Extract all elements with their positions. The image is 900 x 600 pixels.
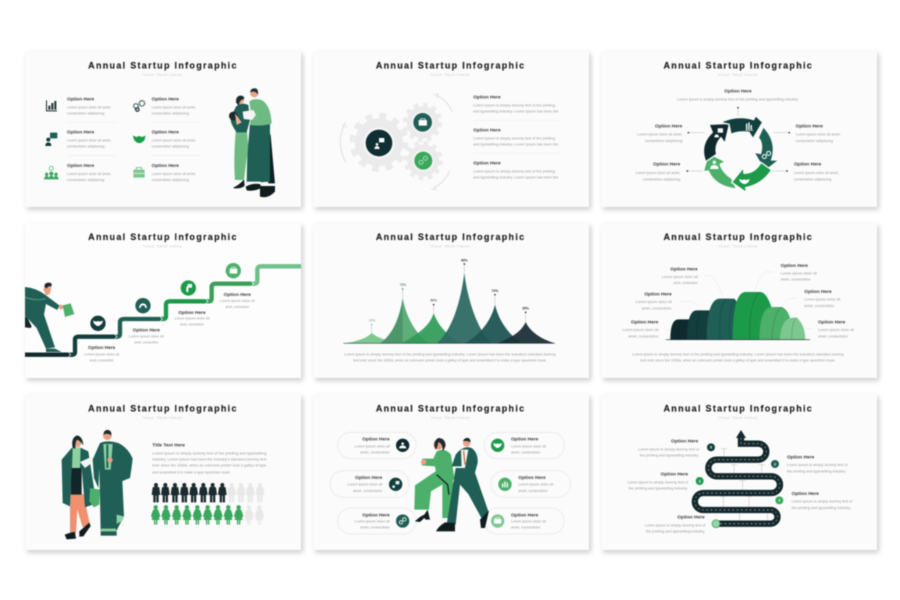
text block: Title Text Here bbox=[152, 442, 186, 447]
option 1 bbox=[67, 96, 111, 115]
label bottom left: the printing and typesetting industry. bbox=[646, 529, 705, 533]
marker 5: 5 bbox=[710, 446, 712, 450]
option left upper: Option Here bbox=[655, 123, 683, 128]
label top left: Option Here bbox=[671, 439, 699, 444]
option 3: Lorem ipsum dolor sit amet, bbox=[67, 172, 111, 176]
road bbox=[695, 430, 780, 524]
option right lower: Option Here bbox=[794, 162, 822, 167]
option 3 bbox=[67, 163, 111, 182]
panel: hills chart bbox=[601, 223, 879, 381]
arrow: lower left segment bbox=[703, 153, 737, 189]
gear: gears icon bbox=[406, 143, 441, 178]
step label 1: amet, consectetur bbox=[90, 358, 114, 362]
chart: peaks: 70% bbox=[492, 289, 498, 293]
step label 2: Lorem ipsum dolor sit bbox=[129, 334, 164, 338]
heading: Annual Startup Infographic bbox=[376, 232, 524, 242]
option right lower: Lorem ipsum dolor sit amet, bbox=[794, 171, 839, 175]
description bbox=[632, 352, 844, 362]
option 1: Lorem ipsum dolor sit amet, bbox=[67, 105, 111, 109]
illustration: walking colleagues bbox=[414, 438, 489, 531]
step label 2 bbox=[129, 328, 164, 344]
option right lower: consectetur adipiscing bbox=[794, 177, 831, 181]
label 1 bbox=[662, 266, 698, 285]
heading: Annual Startup Infographic bbox=[663, 404, 812, 414]
option right lower bbox=[794, 162, 839, 181]
option 2: Option Here bbox=[67, 130, 95, 135]
label bottom left: Lorem ipsum is simply dummy text of bbox=[645, 523, 705, 527]
heading: Annual Startup Infographic bbox=[88, 232, 236, 242]
step label 1 bbox=[84, 345, 119, 362]
panel: gears bbox=[313, 51, 591, 210]
pill: left bottom: Lorem ipsum dolor sit bbox=[355, 520, 390, 524]
option left lower bbox=[635, 162, 681, 181]
option 3: Option Here bbox=[67, 163, 95, 168]
panel: pictogram statistics bbox=[25, 394, 303, 553]
option 4: consectetur adipiscing bbox=[152, 111, 189, 115]
pill: right bottom: amet, consectetur bbox=[511, 526, 541, 530]
step label 3: Option Here bbox=[178, 310, 206, 315]
chart: peaks: 50% bbox=[430, 299, 437, 303]
connectors bbox=[665, 272, 812, 330]
arrow: right segment bbox=[754, 127, 779, 171]
panel: circular arrows bbox=[601, 51, 879, 210]
label 1: amet, consectetur bbox=[674, 281, 698, 285]
step label 4 bbox=[220, 292, 255, 309]
option 6 bbox=[152, 163, 196, 182]
description: Lorem ipsum is simply dummy text of the printing and typesetting industry. Lorem Ipsum has been the industry's standard dummy bbox=[344, 352, 556, 356]
option top: Lorem ipsum is simply dummy text of the printing and typesetting industry. bbox=[677, 98, 799, 102]
panel: people and six options bbox=[25, 51, 303, 210]
label middle left: Lorem ipsum is simply dummy text of bbox=[627, 480, 688, 484]
label 2: amet, consectetur bbox=[642, 306, 673, 310]
step label 2: Option Here bbox=[133, 328, 161, 333]
option 2: Option Here bbox=[473, 127, 501, 132]
subheading: Your Text Here bbox=[430, 416, 470, 420]
option top: Option Here bbox=[724, 88, 752, 93]
label lower right: Option Here bbox=[792, 491, 820, 496]
heading: Annual Startup Infographic bbox=[376, 61, 524, 71]
option 1: Option Here bbox=[67, 96, 95, 101]
pill: right middle: Option Here bbox=[518, 475, 546, 480]
option top bbox=[677, 88, 799, 102]
option 3: and typesetting industry. Lorem Ipsum has been the bbox=[473, 175, 558, 179]
marker 1 bbox=[712, 520, 720, 528]
panel: winding road bbox=[601, 394, 879, 553]
step label 3: Lorem ipsum dolor sit bbox=[174, 317, 210, 321]
label 4 bbox=[781, 263, 817, 282]
label 6: amet, consectetur bbox=[818, 334, 849, 338]
label 2 bbox=[636, 292, 673, 310]
pictogram row: men bbox=[152, 483, 264, 502]
pill: left middle: amet, consectetur bbox=[353, 489, 383, 493]
step label 3: amet, consectetur bbox=[180, 323, 205, 327]
option 4 bbox=[152, 96, 196, 115]
option right upper: Option Here bbox=[796, 123, 824, 128]
label 5: Lorem ipsum dolor sit bbox=[804, 298, 840, 302]
icon: team bbox=[44, 166, 59, 179]
label 3 bbox=[622, 320, 659, 338]
chart: peaks: 75% bbox=[400, 283, 406, 287]
label upper right bbox=[787, 454, 848, 473]
step label 1: Option Here bbox=[88, 345, 116, 350]
heading: Annual Startup Infographic bbox=[88, 404, 236, 414]
pill: left top: Lorem ipsum dolor sit bbox=[355, 444, 390, 448]
option 2: Lorem ipsum is simply dummy text of the printing bbox=[473, 136, 555, 140]
marker 5 bbox=[707, 443, 715, 451]
illustration: man climbing with documents bbox=[25, 283, 74, 352]
icon: gears bbox=[134, 101, 145, 111]
option 2: and typesetting industry. Lorem Ipsum has been the bbox=[473, 142, 558, 146]
step icon 1 bbox=[90, 316, 106, 331]
chart: peaks bbox=[343, 258, 555, 343]
label upper right: Lorem ipsum is simply dummy text of bbox=[787, 463, 848, 467]
chart: peaks: 90% bbox=[461, 258, 468, 262]
pill: left bottom bbox=[338, 508, 416, 534]
pill: left bottom: amet, consectetur bbox=[360, 526, 391, 530]
step icon 3 bbox=[181, 280, 196, 296]
step label 1: Lorem ipsum dolor sit bbox=[84, 352, 119, 356]
pill: left middle: Option Here bbox=[355, 475, 383, 480]
marker 4: 4 bbox=[778, 499, 781, 503]
marker 3: 3 bbox=[699, 479, 701, 483]
stairs path bbox=[25, 266, 301, 357]
pictogram row: women bbox=[151, 505, 264, 525]
label lower right: the printing and typesetting industry. bbox=[792, 506, 851, 510]
step label 3 bbox=[174, 310, 210, 327]
description: text ever since the 1500s, when an unknown printer took a galley of type and scrambled it to make a type specimen book. bbox=[640, 358, 836, 362]
description: text ever since the 1500s, when an unknown printer took a galley of type and scrambled it to make a type specimen book. bbox=[353, 358, 547, 362]
option 6: Option Here bbox=[152, 163, 180, 168]
pill: left top: amet, consectetur bbox=[360, 450, 391, 454]
step label 4: Lorem ipsum dolor sit bbox=[220, 299, 255, 303]
pill: right middle: amet, consectetur bbox=[518, 489, 549, 493]
label middle left bbox=[627, 472, 689, 490]
option 5 bbox=[152, 130, 196, 149]
subheading: Your Text Here bbox=[718, 416, 758, 420]
option 2: Lorem ipsum dolor sit amet, bbox=[67, 139, 111, 143]
label 6 bbox=[818, 319, 854, 338]
pill: left middle bbox=[330, 471, 409, 497]
label lower right bbox=[792, 491, 852, 510]
label 3: Lorem ipsum dolor sit bbox=[622, 328, 658, 332]
text block: ever since the 1500s, when an unknown printer took a galley of type bbox=[152, 463, 266, 467]
text block bbox=[152, 442, 266, 474]
pill: right top: Option Here bbox=[511, 437, 539, 442]
option 2 bbox=[67, 130, 111, 149]
subheading: Your Text Here bbox=[718, 73, 758, 77]
subheading: Your Text Here bbox=[718, 244, 758, 248]
heading: Annual Startup Infographic bbox=[376, 404, 524, 414]
label 3: Option Here bbox=[631, 320, 659, 325]
label bottom left: Option Here bbox=[677, 515, 705, 520]
label top left: the printing and typesetting industry. bbox=[640, 453, 699, 457]
arrow: left segment bbox=[703, 123, 730, 162]
pill: left top: Option Here bbox=[362, 437, 390, 442]
option 4: Lorem ipsum dolor sit amet, bbox=[152, 105, 196, 109]
pill: right bottom bbox=[484, 508, 564, 534]
subheading: Your Text Here bbox=[142, 416, 182, 420]
arrow: lower right segment bbox=[732, 162, 772, 193]
icon: presenter bbox=[45, 133, 57, 146]
panel: peaks chart bbox=[313, 223, 591, 381]
option 1: consectetur adipiscing bbox=[67, 111, 104, 115]
option 3 bbox=[473, 160, 558, 179]
pill: right top: Lorem ipsum dolor sit bbox=[511, 444, 546, 448]
label 1: Option Here bbox=[670, 266, 698, 271]
label 2: Option Here bbox=[644, 292, 672, 297]
option 1: Option Here bbox=[473, 94, 501, 99]
pill: right middle bbox=[491, 471, 571, 497]
label 5 bbox=[804, 289, 840, 308]
subheading: Your Text Here bbox=[142, 244, 182, 248]
label top left bbox=[638, 439, 699, 457]
option 6: consectetur adipiscing bbox=[152, 178, 189, 182]
label 4: Lorem ipsum dolor sit bbox=[781, 271, 817, 275]
pill: left middle: Lorem ipsum dolor sit bbox=[347, 483, 382, 487]
text block: industry. Lorem Ipsum has been the industry's standard dummy text bbox=[152, 458, 266, 462]
pill: right middle: Lorem ipsum dolor sit bbox=[518, 483, 553, 487]
text block: and scrambled it to make a type specimen book. bbox=[152, 470, 231, 474]
icon: bar chart bbox=[46, 100, 57, 111]
pill: left bottom: Option Here bbox=[362, 512, 390, 517]
option 5: Lorem ipsum dolor sit amet, bbox=[152, 139, 196, 143]
label 6: Option Here bbox=[818, 319, 846, 324]
heading: Annual Startup Infographic bbox=[663, 61, 812, 71]
description: Lorem ipsum is simply dummy text of the printing and typesetting industry. Lorem Ipsum has been the industry's standard dummy bbox=[632, 352, 844, 356]
option 1 bbox=[473, 94, 558, 113]
label 1: Lorem ipsum dolor sit bbox=[662, 275, 698, 279]
option 4: Option Here bbox=[152, 96, 180, 101]
arrows: rotation arcs bbox=[340, 94, 452, 190]
pill: right top: amet, consectetur bbox=[511, 450, 541, 454]
subheading: Your Text Here bbox=[142, 73, 182, 77]
option 3: Lorem ipsum is simply dummy text of the printing bbox=[473, 169, 555, 173]
option 6: Lorem ipsum dolor sit amet, bbox=[152, 172, 196, 176]
description bbox=[344, 352, 556, 362]
label 4: Option Here bbox=[781, 263, 809, 268]
label top left: Lorem ipsum is simply dummy text of bbox=[638, 447, 699, 451]
label 5: amet, consectetur bbox=[804, 304, 835, 308]
heading: Annual Startup Infographic bbox=[663, 232, 812, 242]
chart: hills bbox=[666, 292, 810, 340]
illustration: business woman and man bbox=[62, 430, 133, 539]
label 2: Lorem ipsum dolor sit bbox=[636, 300, 672, 304]
label bottom left bbox=[645, 515, 705, 533]
option right upper bbox=[796, 123, 841, 143]
panel: pills and walking figures bbox=[313, 394, 591, 553]
option 3: Option Here bbox=[473, 160, 501, 165]
illustration: couple with baby bbox=[229, 88, 275, 197]
option 3: consectetur adipiscing bbox=[67, 178, 104, 182]
label middle left: Option Here bbox=[661, 472, 689, 477]
label upper right: Option Here bbox=[787, 454, 815, 459]
step icon 2 bbox=[135, 298, 151, 313]
chart: peaks: 15% bbox=[369, 318, 375, 322]
pill: right bottom: Lorem ipsum dolor sit bbox=[511, 520, 546, 524]
label upper right: the printing and typesetting industry. bbox=[787, 469, 846, 473]
label 4: amet, consectetur bbox=[781, 278, 812, 282]
option 2 bbox=[473, 127, 558, 146]
marker 4 bbox=[775, 496, 783, 504]
pill: right bottom: Option Here bbox=[511, 512, 539, 517]
option left upper: consectetur adipiscing bbox=[645, 139, 682, 143]
subheading: Your Text Here bbox=[430, 244, 470, 248]
option 2: consectetur adipiscing bbox=[67, 145, 104, 149]
heading: Annual Startup Infographic bbox=[88, 61, 236, 71]
option 1: and typesetting industry. Lorem Ipsum has been the bbox=[473, 109, 558, 113]
gear: briefcase bbox=[405, 105, 440, 140]
option left lower: Lorem ipsum dolor sit amet, bbox=[635, 171, 680, 175]
chart: peaks: 35% bbox=[522, 306, 529, 310]
option 5: consectetur adipiscing bbox=[152, 145, 189, 149]
label 3: amet, consectetur bbox=[628, 334, 659, 338]
icon: briefcase bbox=[133, 168, 145, 178]
label 6: Lorem ipsum dolor sit bbox=[818, 328, 854, 332]
gear: large with presenter icon bbox=[352, 116, 406, 169]
panel: staircase timeline bbox=[25, 223, 303, 381]
option left upper bbox=[637, 123, 683, 143]
option left lower: Option Here bbox=[653, 162, 681, 167]
option right upper: consectetur adipiscing bbox=[796, 139, 833, 143]
icon: handshake bbox=[133, 136, 146, 143]
step label 4: amet, consectetur bbox=[225, 305, 250, 309]
marker 2 bbox=[771, 460, 779, 468]
label lower right: Lorem ipsum is simply dummy text of bbox=[792, 500, 852, 504]
option left lower: consectetur adipiscing bbox=[643, 177, 680, 181]
pill: right top bbox=[484, 432, 564, 459]
pill: left top bbox=[338, 432, 416, 459]
label 5: Option Here bbox=[804, 289, 832, 294]
step icon 4 bbox=[226, 263, 241, 278]
step label 2: amet, consectetur bbox=[134, 340, 159, 344]
connectors bbox=[686, 107, 790, 172]
label middle left: the printing and typesetting industry. bbox=[629, 486, 688, 490]
marker 3 bbox=[696, 477, 704, 485]
option 5: Option Here bbox=[152, 130, 180, 135]
option right upper: Lorem ipsum dolor sit amet, bbox=[796, 133, 841, 137]
marker 2: 2 bbox=[774, 462, 776, 466]
arrow: top segment bbox=[720, 116, 763, 139]
option left upper: Lorem ipsum dolor sit amet, bbox=[637, 133, 682, 137]
text block: Lorem ipsum is simply dummy text of the printing and typesetting bbox=[152, 452, 266, 456]
option 1: Lorem ipsum is simply dummy text of the printing bbox=[473, 103, 555, 107]
step label 4: Option Here bbox=[224, 292, 252, 297]
subheading: Your Text Here bbox=[430, 73, 470, 77]
